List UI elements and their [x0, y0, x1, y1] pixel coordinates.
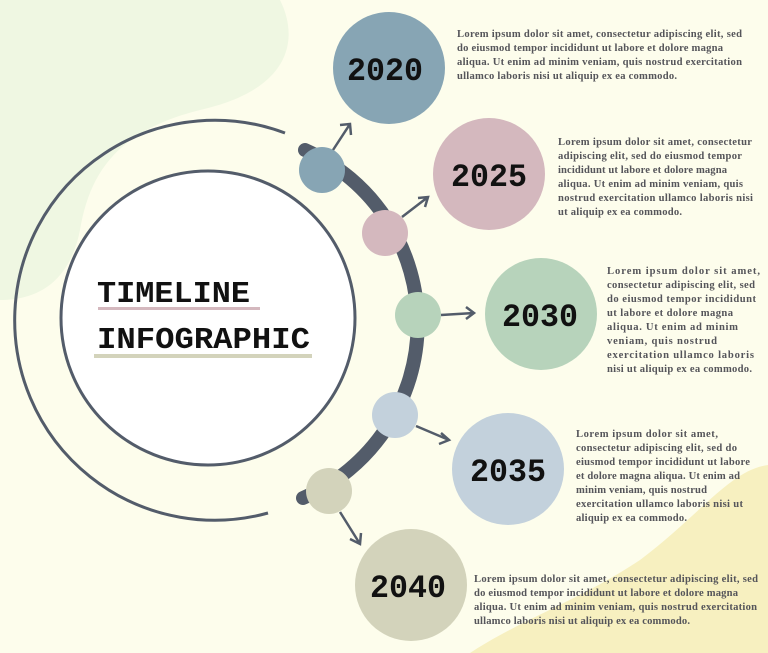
text 2030: consectetur adipiscing elit, sed: [607, 280, 755, 291]
year 2020: 2020: [347, 53, 423, 90]
text 2035: exercitation ullamco laboris nisi ut: [576, 499, 743, 510]
background blob green: [0, 0, 289, 300]
background blob yellow: [470, 465, 768, 653]
text 2035: aliquip ex ea commodo.: [576, 513, 687, 524]
text 2035: Lorem ipsum dolor sit amet,: [576, 429, 718, 440]
text 2030: Lorem ipsum dolor sit amet,: [607, 266, 760, 277]
text 2035: eiusmod tempor incididunt ut labore: [576, 457, 750, 468]
text 2030: do eiusmod tempor incididunt: [607, 294, 756, 305]
text 2020: do eiusmod tempor incididunt ut labore et dolore magna: [457, 43, 724, 54]
small node circles: [299, 147, 441, 514]
text 2040: aliqua. Ut enim ad minim veniam, quis nostrud exercitation: [474, 602, 757, 613]
year 2035: 2035: [470, 454, 546, 491]
text 2040: ullamco laboris nisi ut aliquip ex ea commodo.: [474, 616, 690, 627]
text 2030: aliqua. Ut enim ad minim: [607, 322, 738, 333]
text 2020: Lorem ipsum dolor sit amet, consectetur adipiscing elit, sed: [457, 29, 742, 40]
thick timeline arc: [303, 150, 418, 498]
year 2020: [333, 12, 445, 124]
text 2030: veniam, quis nostrud: [607, 336, 717, 347]
text 2040: Lorem ipsum dolor sit amet, consectetur adipiscing elit, sed: [474, 574, 758, 585]
text 2030: exercitation ullamco laboris: [607, 350, 754, 361]
text 2040: do eiusmod tempor incididunt ut labore et dolore magna: [474, 588, 739, 599]
text 2030: ut labore et dolore magna: [607, 308, 734, 319]
year 2030: [485, 258, 597, 370]
text 2025: Lorem ipsum dolor sit amet, consectetur: [558, 137, 752, 148]
title: TIMELINE: [97, 277, 250, 312]
text 2025: incididunt ut labore et dolore magna: [558, 165, 728, 176]
year 2035: [452, 413, 564, 525]
title: [94, 277, 312, 358]
text 2025: ut aliquip ex ea commodo.: [558, 207, 682, 218]
year 2025: [433, 118, 545, 230]
outer thin arc: [15, 120, 285, 520]
year 2030: 2030: [502, 299, 578, 336]
year 2025: 2025: [451, 159, 527, 196]
text 2020: aliqua. Ut enim ad minim veniam, quis nostrud exercitation: [457, 57, 742, 68]
text 2035: et dolore magna aliqua. Ut enim ad: [576, 471, 740, 482]
text 2035: consectetur adipiscing elit, sed do: [576, 443, 737, 454]
text 2030: nisi ut aliquip ex ea commodo.: [607, 364, 752, 375]
text 2025: adipiscing elit, sed do eiusmod tempor: [558, 151, 742, 162]
inner white circle: [61, 171, 355, 465]
text 2025: aliqua. Ut enim ad minim veniam, quis: [558, 179, 743, 190]
text 2020: ullamco laboris nisi ut aliquip ex ea commodo.: [457, 71, 677, 82]
title: INFOGRAPHIC: [97, 323, 310, 358]
text 2025: nostrud exercitation ullamco laboris nisi: [558, 193, 753, 204]
year 2040: 2040: [370, 570, 446, 607]
year 2040: [355, 529, 467, 641]
text 2035: minim veniam, quis nostrud: [576, 485, 707, 496]
arrows: [333, 124, 474, 544]
